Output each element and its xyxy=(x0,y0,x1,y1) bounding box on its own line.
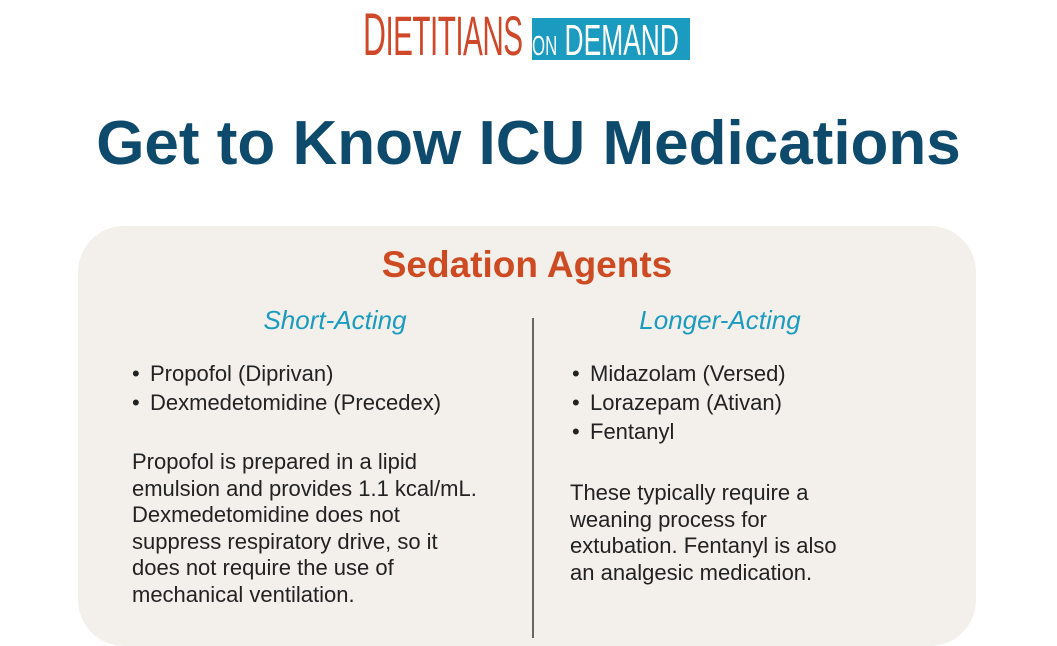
text short-acting: mechanical ventilation. xyxy=(132,582,355,606)
text longer-acting: an analgesic medication. xyxy=(570,560,812,584)
text longer-acting xyxy=(570,480,837,584)
title: Get to Know ICU Medications xyxy=(96,109,961,178)
logo: dietitians: DIETITIANS xyxy=(363,1,522,68)
subheading short-acting: Short-Acting xyxy=(263,305,407,335)
list longer-acting: Midazolam (Versed) xyxy=(590,361,786,386)
text short-acting: emulsion and provides 1.1 kcal/mL. xyxy=(132,476,477,500)
text longer-acting: These typically require a xyxy=(570,480,808,505)
text short-acting: Propofol is prepared in a lipid xyxy=(132,449,417,474)
text short-acting: does not require the use of xyxy=(132,555,394,580)
divider xyxy=(532,318,534,638)
subheading longer-acting: Longer-Acting xyxy=(639,305,801,335)
logo xyxy=(363,1,690,68)
text short-acting: suppress respiratory drive, so it xyxy=(132,528,438,554)
list short-acting: Propofol (Diprivan) xyxy=(150,361,333,386)
column: longer-acting xyxy=(570,305,837,584)
text longer-acting: extubation. Fentanyl is also xyxy=(570,533,837,558)
list short-acting: Dexmedetomidine (Precedex) xyxy=(150,390,441,415)
list longer-acting: Lorazepam (Ativan) xyxy=(590,390,782,415)
text short-acting xyxy=(132,449,477,606)
panel heading: Sedation Agents xyxy=(382,244,672,285)
list short-acting xyxy=(132,361,441,415)
column: short-acting xyxy=(132,305,477,606)
text longer-acting: weaning process for xyxy=(570,506,767,532)
list longer-acting xyxy=(572,361,786,444)
panel: sedation agents xyxy=(78,226,976,646)
text short-acting: Dexmedetomidine does not xyxy=(132,502,400,527)
list longer-acting: Fentanyl xyxy=(590,419,674,444)
